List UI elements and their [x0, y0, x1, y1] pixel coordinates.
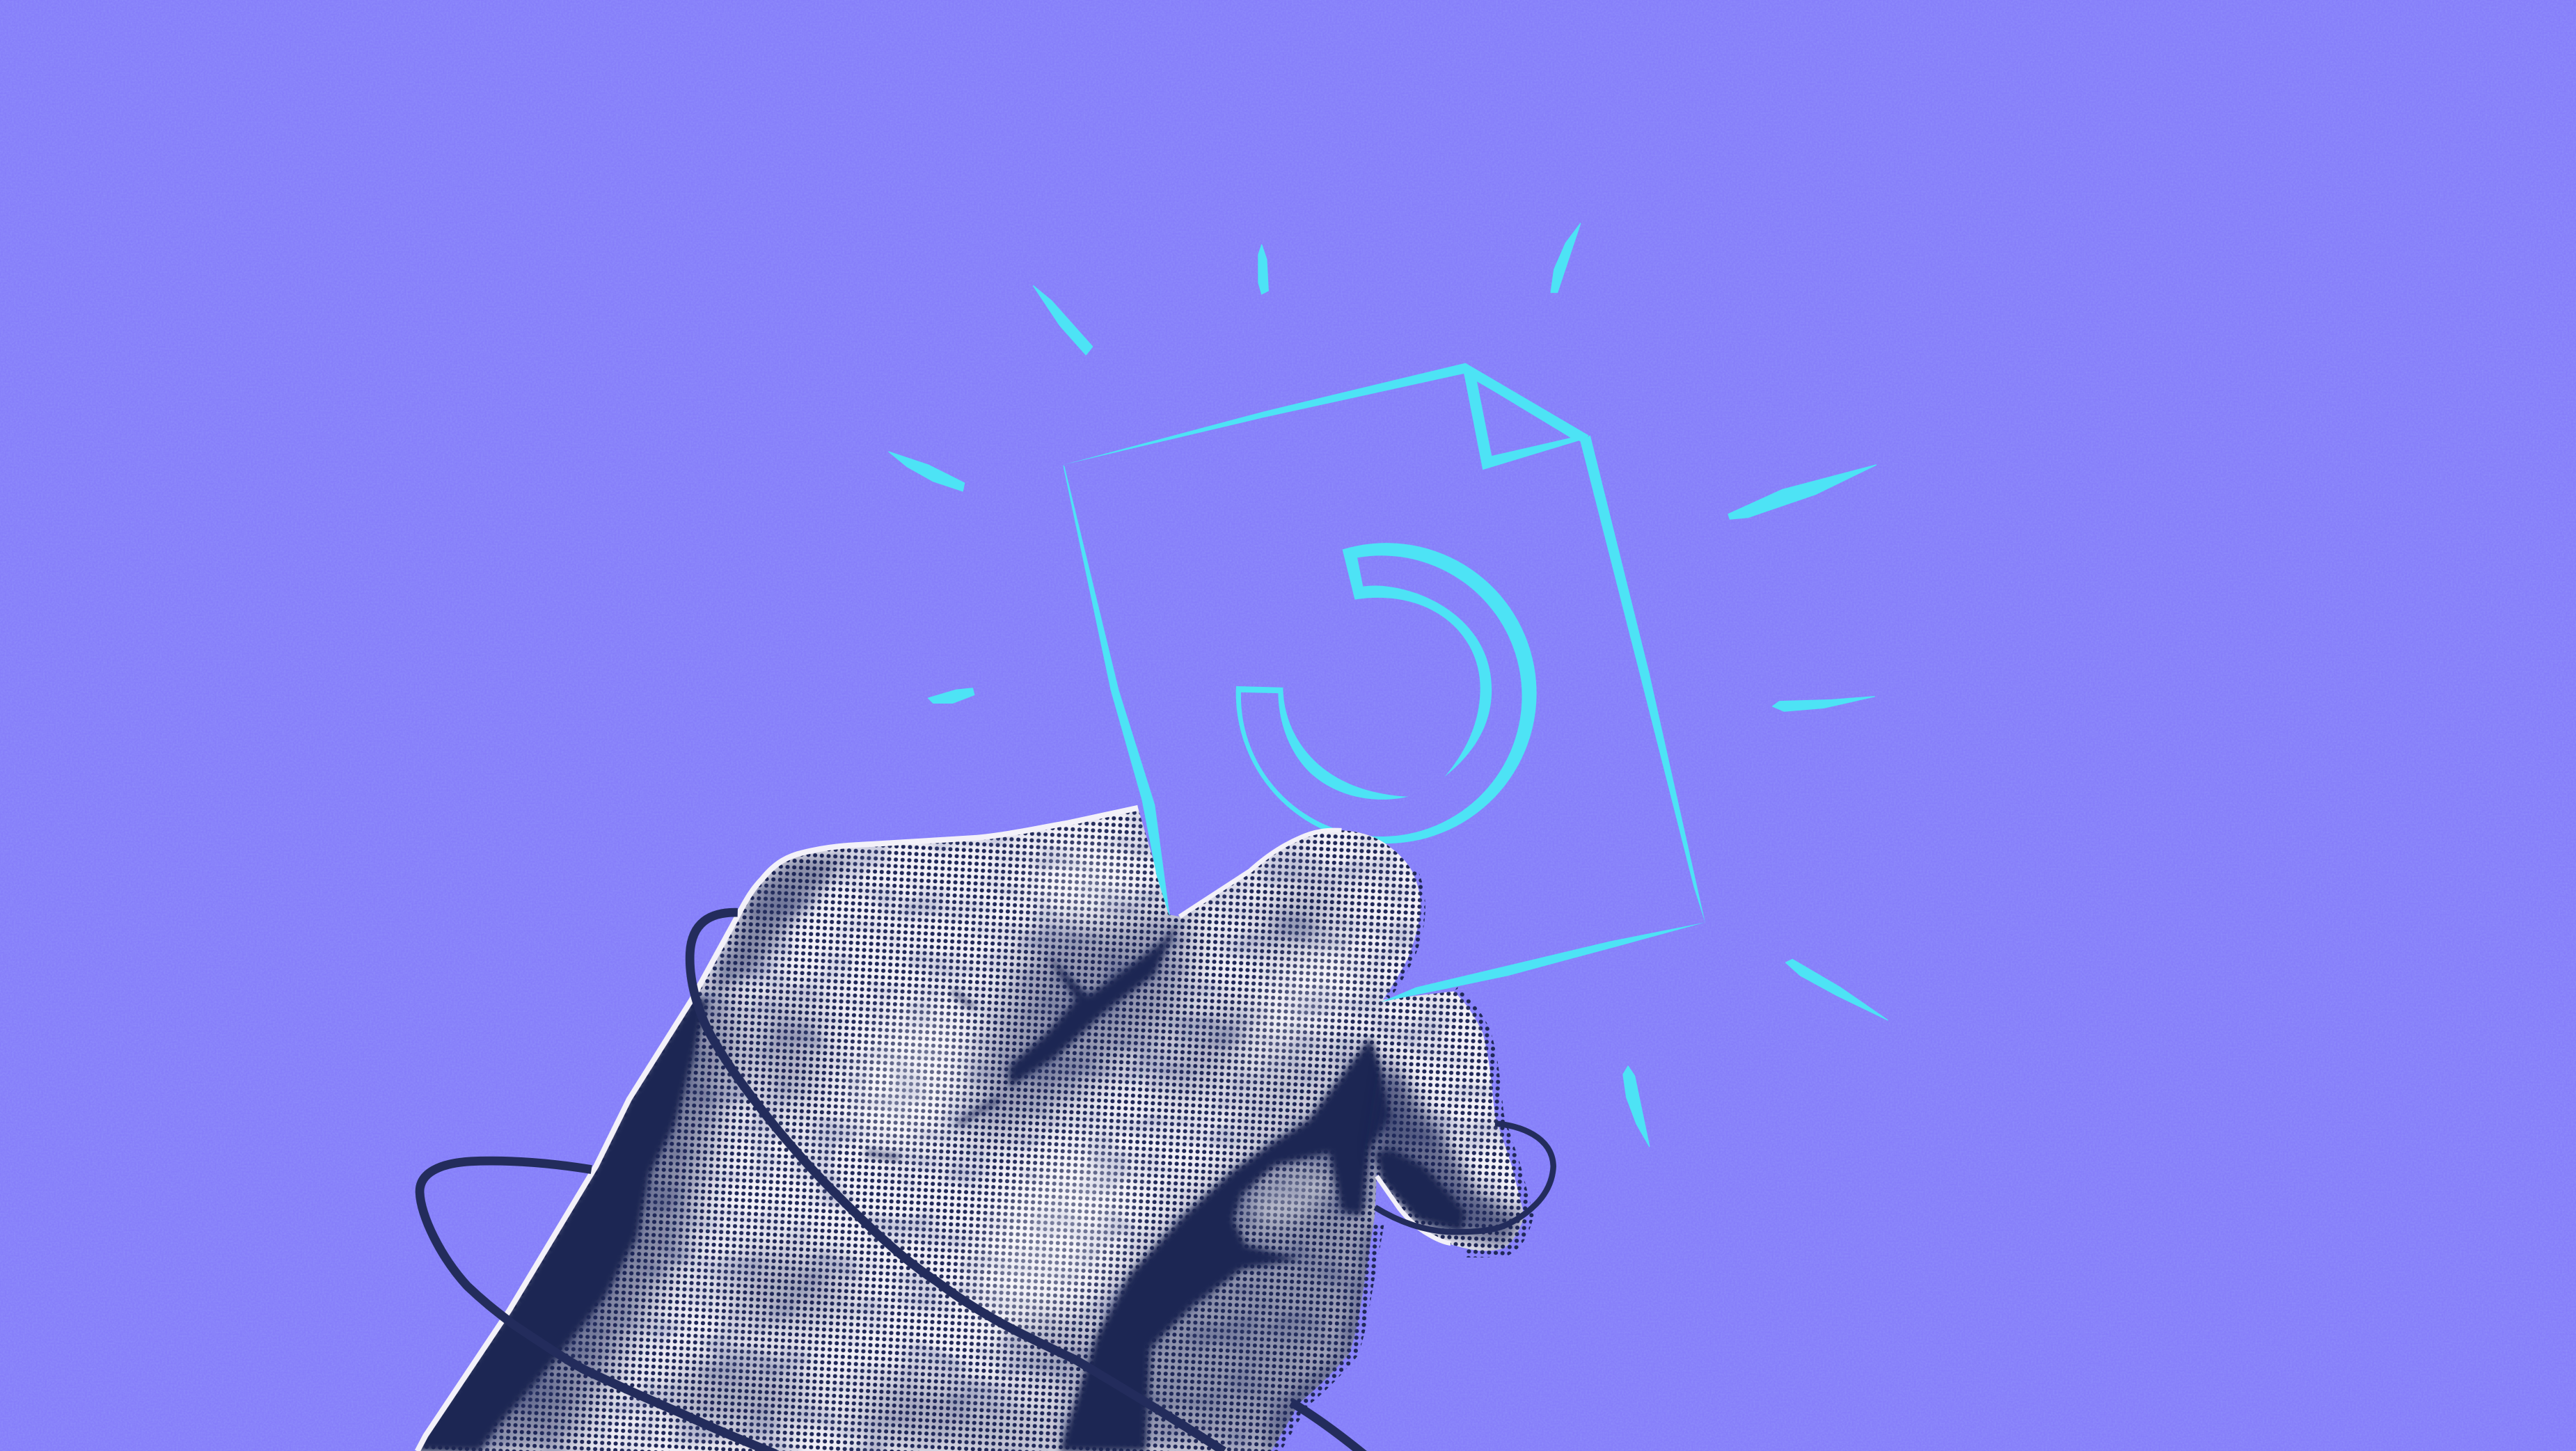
- decorative loop: orbit line crossing the knuckles: [690, 912, 1224, 1451]
- shading: fine creases on the knuckles: [866, 991, 999, 1157]
- shading: soft gradient beside the wrist: [432, 969, 739, 1450]
- highlight: lit thumb: [1224, 919, 1372, 1085]
- shading: dark fold below the thumb: [1059, 1037, 1391, 1451]
- shading: tonal blotches on back of hand: [665, 870, 1350, 1451]
- shading: crease halo: [970, 912, 1191, 1150]
- decorative loop: orbit line around the wrist: [420, 1161, 775, 1451]
- icon: donut chart on document: [1236, 543, 1537, 843]
- highlight: lit central area: [947, 1125, 1155, 1356]
- shading: finger soft shadow: [1373, 1059, 1524, 1248]
- hand: halftone hand pinching the document: [394, 788, 1560, 1451]
- highlight: lit first knuckle: [1035, 848, 1134, 920]
- highlight: lit pad between fold lines: [1241, 1160, 1338, 1238]
- shading: right edge of palm: [1268, 1223, 1377, 1450]
- shading: dark band along the wrist edge: [411, 1000, 708, 1451]
- shading: halo around dark palm fold: [1052, 1036, 1396, 1450]
- shading: knuckle top: [710, 854, 854, 994]
- hand: halftone spill on shadow edges: [1274, 871, 1528, 1451]
- decorative loop: orbit line end below palm: [1291, 1402, 1365, 1451]
- decorative loop: orbit line around the finger: [1375, 1123, 1554, 1232]
- hand: white rim light on the left edge: [418, 808, 1138, 1451]
- highlight: lit knuckle: [831, 986, 993, 1166]
- shading: mottled skin tone: [477, 810, 1523, 1451]
- hand: rim light under finger: [1377, 1176, 1451, 1244]
- icon: radiating sparks around document: [889, 223, 1888, 1147]
- hand: rim light on thumb: [1180, 830, 1341, 917]
- shading: crease between fingers: [1009, 921, 1180, 1087]
- icon: document outline with folded corner: [1063, 363, 1705, 923]
- icon: document edges overlapping the hand: [1063, 465, 1705, 1002]
- shading: finger dark core: [1375, 1149, 1466, 1232]
